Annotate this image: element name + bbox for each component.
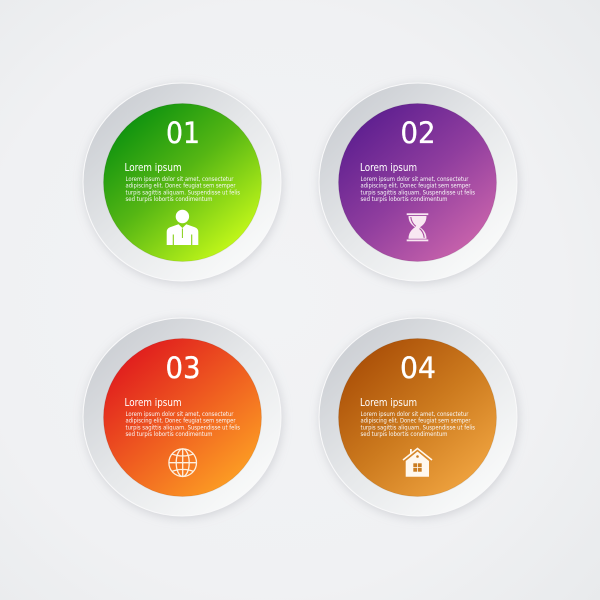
- colored disc 03: [104, 338, 262, 496]
- heading 03: Lorem ipsum: [124, 397, 182, 409]
- number 02: 02: [400, 116, 436, 150]
- heading 02: Lorem ipsum: [360, 162, 417, 174]
- colored disc 01: [104, 104, 262, 262]
- heading 01: Lorem ipsum: [124, 162, 182, 174]
- text block 01: Lorem ipsum dolor sit amet, consectetur: [126, 176, 234, 183]
- panel: 01: [83, 83, 281, 281]
- panel: 03: [83, 318, 281, 516]
- text block 01: turpis sagittis aliquam. Suspendisse ut felis: [126, 189, 240, 196]
- outer ring 03: [83, 318, 281, 516]
- text block 03: sed turpis lobortis condimentum: [126, 431, 212, 438]
- text block 04: Lorem ipsum dolor sit amet, consectetur: [360, 411, 469, 418]
- text block 02: adipiscing elit. Donec feugiat sem semper: [360, 183, 471, 190]
- text block 02: turpis sagittis aliquam. Suspendisse ut felis: [360, 189, 475, 196]
- heading 04: Lorem ipsum: [360, 397, 417, 409]
- text block 03: turpis sagittis aliquam. Suspendisse ut felis: [126, 424, 240, 431]
- number 03: 03: [166, 351, 200, 385]
- text block 01: sed turpis lobortis condimentum: [126, 196, 212, 203]
- colored disc 04: [338, 338, 496, 496]
- text block 04: [360, 411, 475, 438]
- outer ring 01: [83, 83, 281, 281]
- colored disc 02: [338, 104, 496, 262]
- text block 02: Lorem ipsum dolor sit amet, consectetur: [360, 176, 469, 183]
- text block 02: [360, 176, 475, 203]
- outer ring 04: [319, 318, 517, 516]
- icon: globe: [169, 449, 196, 477]
- number 04: 04: [400, 351, 436, 385]
- icon: hourglass: [407, 213, 428, 241]
- text block 01: adipiscing elit. Donec feugiat sem semper: [126, 183, 236, 190]
- text block 04: adipiscing elit. Donec feugiat sem semper: [360, 418, 471, 425]
- icon: businessman: [167, 210, 198, 245]
- text block 01: [126, 176, 240, 203]
- text block 04: turpis sagittis aliquam. Suspendisse ut felis: [360, 424, 475, 431]
- text block 02: sed turpis lobortis condimentum: [360, 196, 448, 203]
- panel: 02: [319, 83, 517, 281]
- outer ring 02: [319, 83, 517, 281]
- number 01: 01: [166, 116, 200, 150]
- panel: 04: [319, 318, 517, 516]
- icon: house: [403, 448, 432, 477]
- text block 03: [126, 411, 240, 438]
- text block 03: adipiscing elit. Donec feugiat sem semper: [126, 418, 236, 425]
- text block 04: sed turpis lobortis condimentum: [360, 431, 448, 438]
- text block 03: Lorem ipsum dolor sit amet, consectetur: [126, 411, 234, 418]
